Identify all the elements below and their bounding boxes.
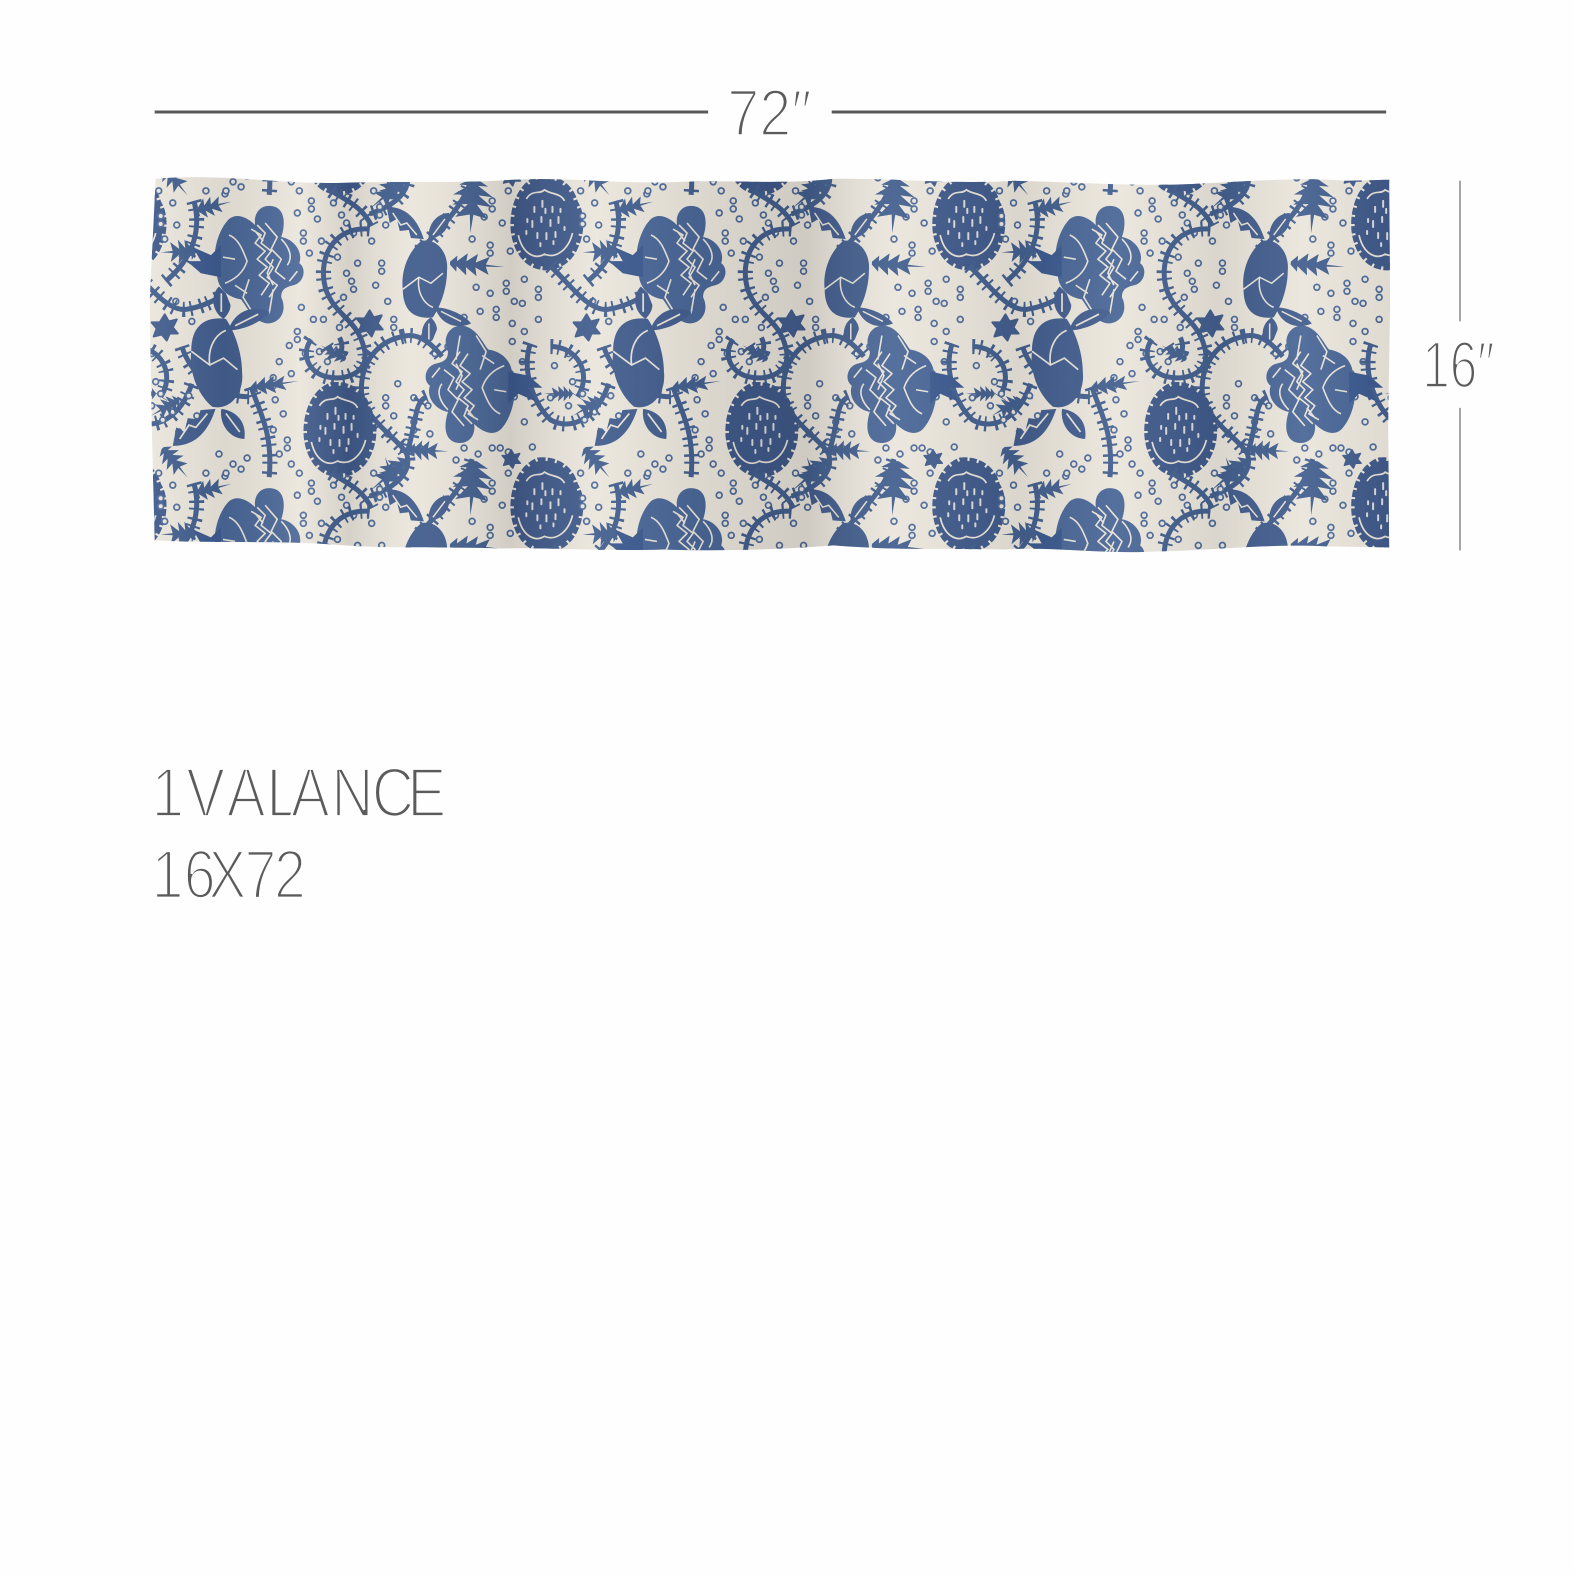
valance fabric swatch — [150, 177, 1390, 552]
width label: 72″ — [727, 77, 812, 151]
height line top — [1459, 181, 1461, 321]
product size: 16X72 — [152, 837, 306, 913]
height line bottom — [1459, 408, 1461, 550]
height label: 16″ — [1422, 329, 1495, 403]
width line left — [155, 110, 708, 113]
product name: 1 VALANCE — [152, 754, 446, 832]
product description — [152, 754, 446, 913]
curtain body with floral print — [150, 177, 1390, 552]
width line right — [832, 110, 1386, 113]
